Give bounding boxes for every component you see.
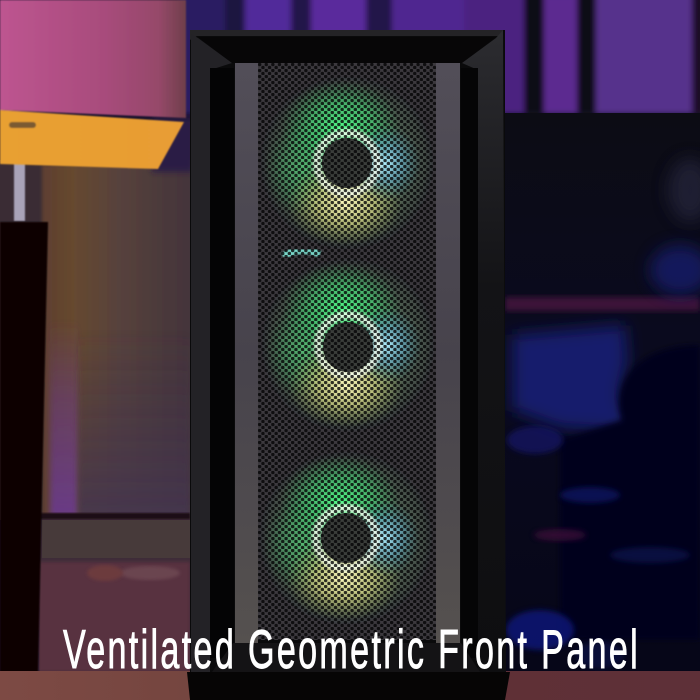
right bevel	[462, 30, 506, 672]
shadow beside shade	[152, 118, 194, 172]
lamp shade	[0, 0, 186, 169]
mesh panel	[258, 63, 436, 640]
left wall	[0, 118, 195, 520]
cool tint on wall	[78, 330, 190, 516]
lamp stem	[14, 155, 25, 221]
curtains	[180, 0, 700, 114]
black stand	[0, 222, 48, 672]
lower left panel	[38, 513, 190, 672]
upper right haze	[668, 158, 700, 222]
case body	[190, 30, 505, 700]
glimpse of interior light	[283, 250, 320, 256]
PC case	[187, 30, 510, 700]
fan: top	[260, 76, 434, 250]
hub: top	[322, 138, 372, 188]
left black channel	[210, 68, 234, 658]
purple glow on wall	[50, 320, 78, 516]
dark figure	[560, 345, 700, 640]
base	[187, 672, 510, 700]
left grey strip	[235, 63, 258, 643]
top bevel	[198, 37, 496, 63]
title: Ventilated Geometric Front Panel	[63, 619, 638, 680]
fan: middle	[261, 258, 435, 432]
mesh holes	[258, 63, 436, 640]
blue glow	[512, 325, 632, 432]
lower right speckles	[507, 426, 563, 454]
red stripe	[505, 297, 700, 311]
fan: bottom	[259, 451, 433, 625]
left bevel	[191, 34, 232, 672]
right wall	[500, 113, 700, 675]
right grey strip	[436, 63, 460, 643]
table	[0, 671, 700, 700]
case top frame	[190, 30, 503, 40]
right black channel	[461, 68, 478, 658]
hub: bottom	[321, 513, 371, 563]
bottom bevel	[212, 643, 480, 672]
hub: middle	[323, 322, 373, 372]
